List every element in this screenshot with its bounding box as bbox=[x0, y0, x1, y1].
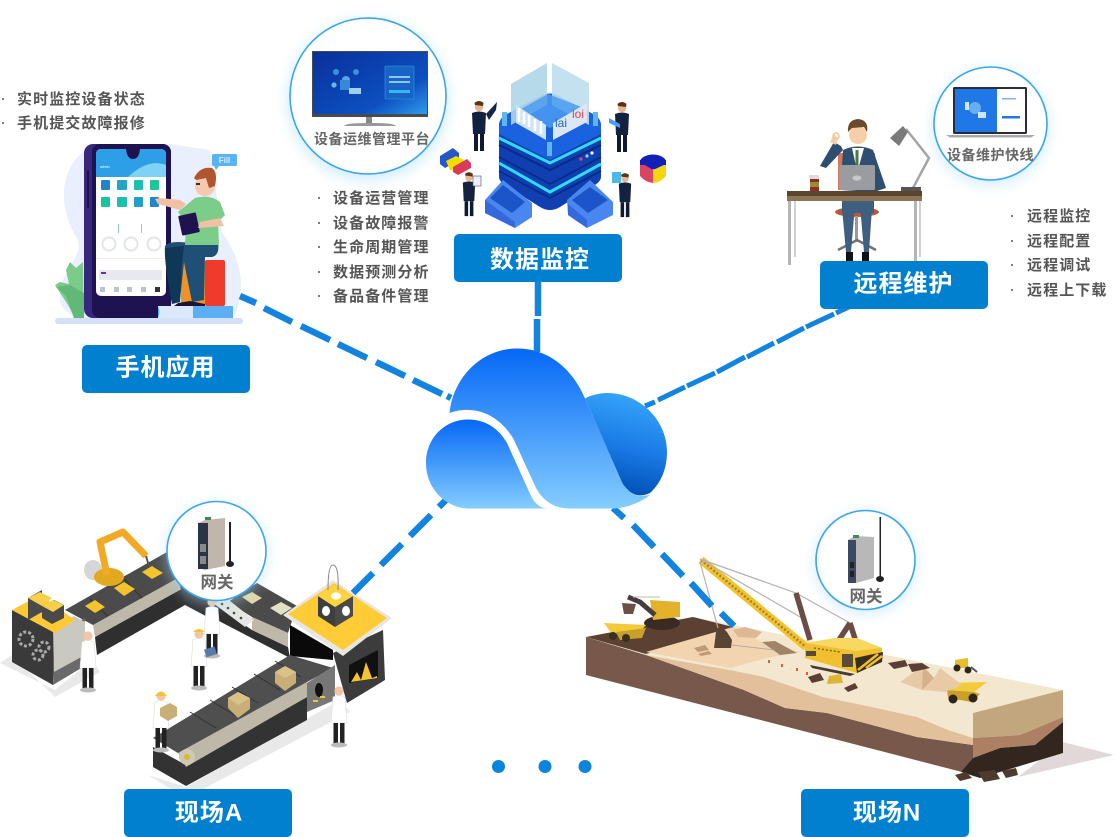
glass panels: lai bbox=[555, 116, 567, 130]
connector: site A to cloud bbox=[353, 499, 447, 593]
maintenance hotline circle bbox=[932, 67, 1048, 185]
tower body bbox=[499, 94, 601, 210]
button: data monitoring: 数据监控 bbox=[490, 246, 590, 274]
button: site N: 现场N bbox=[853, 800, 921, 826]
bullet list: platform features bbox=[318, 189, 430, 305]
control consoles bbox=[485, 180, 613, 228]
hotline caption: 设备维护快线 bbox=[947, 147, 1034, 163]
gateway device bbox=[848, 517, 884, 583]
bullet list: platform features: 设备运营管理 bbox=[333, 189, 430, 207]
dump truck right bbox=[943, 682, 987, 704]
figures around tower bbox=[463, 101, 631, 217]
excavator bbox=[622, 597, 680, 630]
bullet list: platform features: 设备故障报警 bbox=[333, 214, 430, 232]
phone body: admin bbox=[100, 165, 110, 169]
button: site A: 现场A bbox=[175, 800, 243, 826]
desk lamp bbox=[890, 126, 929, 191]
dashed connectors bbox=[240, 282, 853, 626]
monitor bbox=[312, 51, 428, 126]
station with yellow platform bbox=[283, 565, 392, 703]
ellipsis dots bbox=[492, 760, 592, 773]
speech bubble: Fill bbox=[219, 156, 230, 165]
mine top surface bbox=[586, 617, 1063, 745]
seated person with tablet bbox=[155, 168, 233, 318]
back conveyor right bbox=[213, 583, 297, 658]
gateway label: 网关 bbox=[200, 573, 234, 592]
bullet list: mobile app features: 手机提交故障报修 bbox=[17, 114, 146, 132]
engineer bbox=[820, 119, 886, 261]
dragline crane bbox=[700, 559, 883, 676]
button: site A bbox=[124, 789, 292, 837]
connector: remote maintenance to cloud bbox=[645, 305, 853, 406]
traffic cones bbox=[768, 660, 808, 675]
bullet list: remote maintenance features: 远程配置 bbox=[1027, 233, 1091, 250]
illustration: factory production line (site A) bbox=[0, 532, 392, 798]
connector: site N to cloud bbox=[613, 508, 734, 626]
bullet list: remote maintenance features: 远程监控 bbox=[1027, 207, 1091, 225]
gateway label: 网关 bbox=[850, 587, 883, 606]
illustration: data center tower bbox=[440, 63, 666, 228]
button: mobile app bbox=[82, 345, 250, 393]
coffee cup bbox=[809, 175, 819, 191]
button: mobile app: 手机应用 bbox=[116, 354, 216, 382]
desk bbox=[787, 191, 922, 265]
connector: mobile app to cloud bbox=[240, 296, 451, 398]
gateway circle: site N bbox=[816, 510, 916, 613]
bullet list: remote maintenance features bbox=[1011, 207, 1108, 299]
platform caption: 设备运维管理平台 bbox=[314, 131, 430, 147]
gravel piles bbox=[900, 666, 962, 692]
brown soil side bbox=[586, 637, 973, 772]
chair bbox=[835, 153, 879, 250]
robot arm bbox=[84, 532, 149, 586]
dump truck left bbox=[604, 623, 646, 642]
illustration: remote maintenance engineer at desk bbox=[787, 119, 929, 265]
right cross-section bbox=[955, 690, 1063, 782]
cloud core bbox=[426, 348, 667, 508]
left machine bbox=[12, 590, 85, 685]
laptop screen bbox=[946, 87, 1035, 138]
colored blocks bbox=[440, 148, 471, 175]
bulldozer bbox=[954, 658, 977, 674]
platform circle: equipment O&M platform bbox=[288, 18, 448, 180]
gateway circle: site A bbox=[166, 502, 266, 604]
gateway device bbox=[198, 517, 234, 570]
bullet list: mobile app features bbox=[2, 90, 146, 132]
rocks and loader bbox=[808, 660, 930, 692]
phone body bbox=[84, 144, 171, 318]
pie chart bbox=[640, 154, 666, 183]
button: data monitoring bbox=[454, 234, 622, 282]
bullet list: platform features: 备品备件管理 bbox=[333, 287, 430, 305]
illustration: phone and seated user bbox=[55, 144, 243, 324]
illustration: open-pit mine with dragline (site N) bbox=[586, 559, 1114, 782]
bullet list: platform features: 数据预测分析 bbox=[333, 263, 430, 281]
button: site N bbox=[801, 789, 969, 837]
front conveyor bbox=[153, 655, 335, 786]
connector: data monitoring to cloud bbox=[537, 282, 538, 352]
glass panels: loi bbox=[572, 107, 584, 121]
workers bbox=[80, 597, 347, 752]
laptop bbox=[839, 165, 875, 190]
button: remote maintenance bbox=[820, 261, 988, 309]
back conveyor left bbox=[65, 552, 217, 655]
floor shadows bbox=[0, 655, 350, 798]
button: remote maintenance: 远程维护 bbox=[854, 270, 954, 298]
bullet list: mobile app features: 实时监控设备状态 bbox=[17, 90, 146, 108]
ground shadow bbox=[1018, 742, 1114, 777]
bullet list: platform features: 生命周期管理 bbox=[333, 238, 430, 256]
speech bubble bbox=[212, 154, 237, 170]
bullet list: remote maintenance features: 远程上下载 bbox=[1027, 281, 1108, 299]
bullet list: remote maintenance features: 远程调试 bbox=[1027, 257, 1091, 274]
glass panels bbox=[511, 63, 589, 140]
